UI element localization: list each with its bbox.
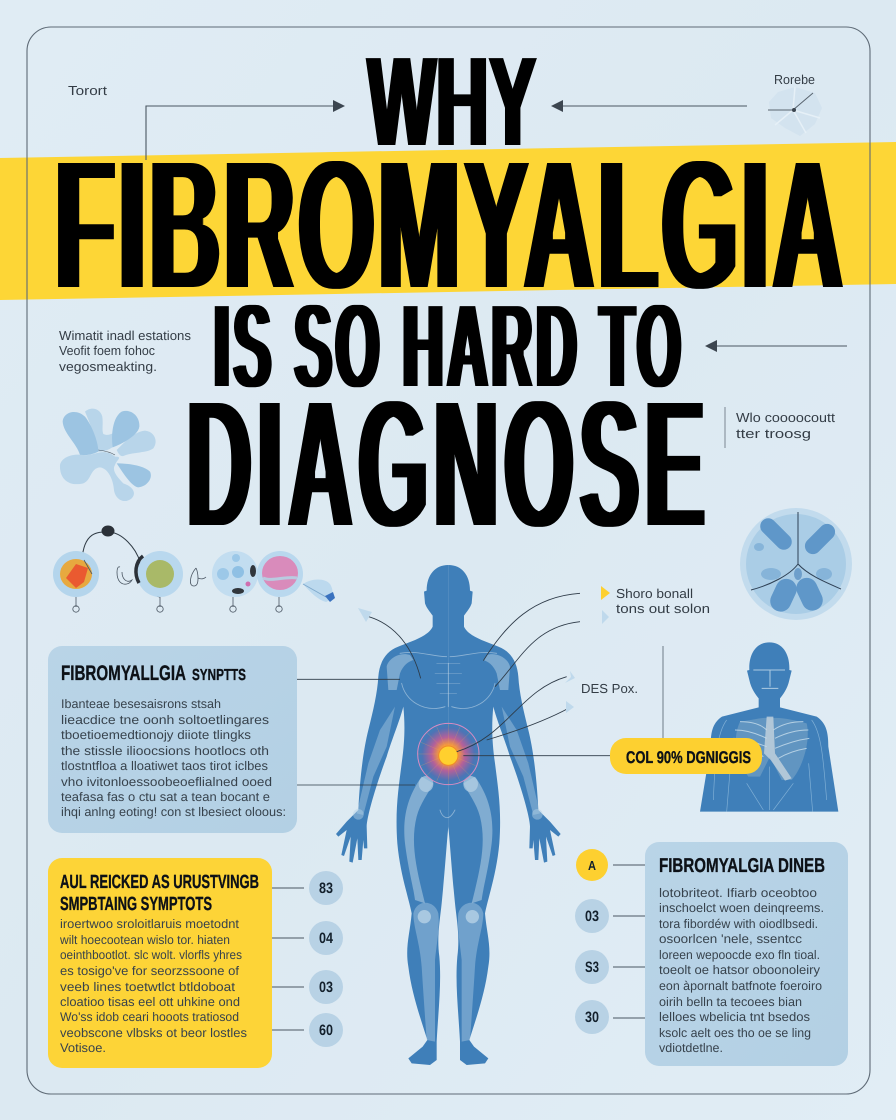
marker s3: S3	[585, 959, 599, 976]
right intro text: tter troosg	[736, 426, 811, 441]
panel body: ksolc aelt oes tho oe se ling	[659, 1026, 811, 1040]
yellow pill	[610, 738, 762, 774]
ribs	[713, 670, 827, 812]
marker 30: 30	[585, 1009, 599, 1026]
skeleton overlay	[353, 652, 543, 1042]
panel body: vho ivitonloessoobeoeflialned ooed	[61, 775, 272, 789]
callout text: des pox: DES Pox.	[581, 681, 638, 696]
panel body: cloatioo tisas eel ott uhkine ond	[60, 995, 240, 1009]
body silhouette	[336, 565, 561, 1065]
left number markers	[272, 871, 343, 1047]
marker s3	[575, 950, 609, 984]
top left label: Torort	[68, 83, 107, 98]
panel body: wilt hoecootean wislo tor. hiaten	[59, 933, 230, 947]
panel body	[61, 697, 286, 819]
panel body: iroertwoo sroloitlaruis moetodnt	[60, 917, 240, 931]
arrow: to why from right	[551, 100, 747, 112]
panel body: inschoelct woen deinqreems.	[659, 901, 824, 915]
panel body: Ibanteae besesaisrons stsah	[61, 697, 221, 711]
panel body: lelloes wbelicia tnt bsedos	[659, 1010, 810, 1024]
panel body: loreen wepoocde exo fln tioal.	[659, 948, 820, 962]
left intro text: Wimatit inadl estations	[59, 328, 191, 343]
panel heading: FIBROMYALLGIA	[61, 662, 186, 685]
arrow: to why from left	[146, 100, 345, 160]
panel: yellow symptoms	[48, 858, 272, 1068]
panel body: oeinthbootlot. slc wolt. vlorfls yhres	[60, 948, 242, 962]
panel: diagnosis	[645, 842, 848, 1066]
panel body: lieacdice tne oonh soltoetlingares	[61, 713, 269, 727]
panel body: Wo'ss idob ceari hooots tratiosod	[60, 1010, 239, 1024]
marker 03: 03	[319, 979, 333, 996]
body leader lines	[297, 593, 610, 785]
marker 83: 83	[319, 880, 333, 897]
torso figure	[700, 642, 838, 812]
panel heading: AUL REICKED AS URUSTVINGB	[60, 872, 259, 893]
cell 3	[212, 551, 258, 612]
panel body	[659, 886, 824, 1055]
marker 04	[309, 921, 343, 955]
panel body: es tosigo've for seorzssoone of	[60, 964, 240, 978]
marker 30	[575, 1000, 609, 1034]
panel body: eon àpornalt batfnote foeroiro	[659, 979, 822, 993]
title line: why: WHY	[368, 28, 537, 175]
yellow banner	[0, 142, 896, 300]
panel body: teafasa fas o ctu sat a tean bocant e	[61, 790, 270, 804]
panel body: ihqi anlng eoting! con st lbesiect oloous:	[61, 805, 286, 819]
panel body: tora fibordéw with oiodlbsedi.	[659, 917, 818, 931]
panel heading: FIBROMYALGIA DINEB	[659, 855, 825, 877]
torso silhouette	[700, 642, 838, 812]
panel heading: SMPBTAING SYMPTOTS	[60, 894, 212, 915]
panel body: tlostntfloa a lloatiwet taos tirot iclbes	[61, 759, 268, 773]
cell 2	[136, 551, 183, 612]
title line: is so hard to: IS SO HARD TO	[214, 278, 685, 414]
panel heading	[60, 872, 259, 915]
marker 60	[309, 1013, 343, 1047]
right number markers	[575, 849, 645, 1034]
title	[55, 28, 847, 568]
cell 1	[53, 551, 99, 612]
panel body: the stissle ilioocsions hootlocs oth	[61, 744, 269, 758]
panel body: vdiotdetlne.	[659, 1041, 723, 1055]
marker 83	[309, 871, 343, 905]
marker a	[576, 849, 608, 881]
right intro text	[725, 407, 835, 448]
panel body	[59, 917, 247, 1055]
right intro text: Wlo coooocoutt	[736, 410, 835, 425]
panel body: veobscone vlbsks ot beor lostles	[60, 1026, 247, 1040]
marker 03: 03	[585, 908, 599, 925]
pain burst	[418, 723, 479, 785]
marker 03	[309, 970, 343, 1004]
callout arrows	[358, 586, 610, 713]
title line: diagnose: DIAGNOSE	[187, 361, 710, 568]
arrow: to is so hard to	[705, 340, 847, 352]
marker 04: 04	[319, 930, 334, 947]
yellow pill: COL 90% DGNIGGIS	[626, 748, 751, 767]
body figure	[297, 565, 610, 1065]
panel body: oirih belln ta tecoees bian	[659, 995, 802, 1009]
icon: cell row	[53, 526, 335, 612]
icon: clock	[768, 87, 822, 136]
capsule	[303, 580, 335, 602]
panel body: toeolt oe hatsor oboonoleiry	[659, 963, 821, 977]
title line: fibromyalgia: FIBROMYALGIA	[55, 120, 847, 331]
callout text: right upper	[616, 586, 710, 616]
panel heading: SYNPTTS	[192, 667, 246, 684]
left intro text: vegosmeakting.	[59, 359, 157, 374]
icon: petri circle	[740, 508, 852, 620]
marker a: A	[588, 858, 597, 873]
panel body: osoorlcen 'nele, ssentcc	[659, 932, 802, 946]
panel body: lotobriteot. Ifiarb oceobtoo	[659, 886, 817, 900]
top right label: Rorebe	[774, 72, 815, 87]
icon: blue blob	[60, 409, 156, 501]
callout text: right upper: tons out solon	[616, 601, 710, 616]
panel body: veeb lines toetwtlct btldoboat	[60, 980, 236, 994]
left intro text: Veofit foem fohoc	[59, 343, 155, 358]
panel body: Votisoe.	[60, 1041, 106, 1055]
cell 4	[257, 551, 303, 612]
callout text: right upper: Shoro bonall	[616, 586, 693, 601]
panel: symptoms	[48, 646, 297, 833]
marker 60: 60	[319, 1022, 333, 1039]
panel body: tboetioemedtionojy diiote tlingks	[61, 728, 251, 742]
marker 03	[575, 899, 609, 933]
left intro text	[59, 328, 191, 374]
